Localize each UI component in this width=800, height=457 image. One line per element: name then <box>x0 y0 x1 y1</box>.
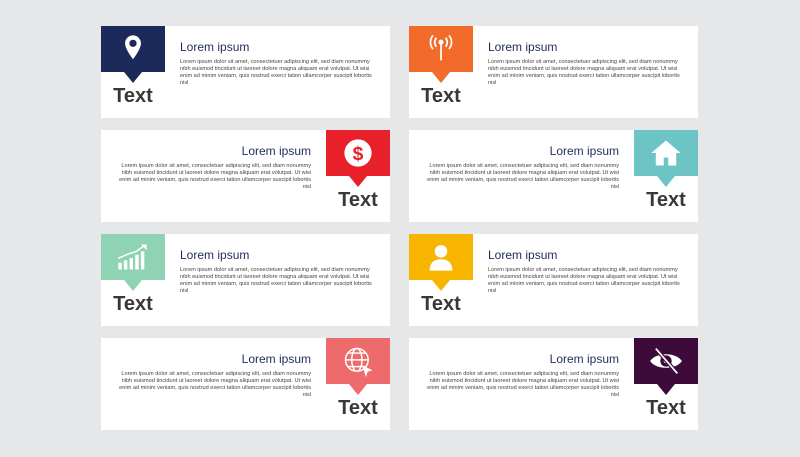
label text: Text <box>421 85 461 107</box>
label text: Text <box>113 85 153 107</box>
body text: Lorem ipsum dolor sit amet, consectetuer adipiscing elit, sed diam nonummy nibh euismod tincidunt ut laoreet dolore magna aliquam erat volutpat. Ut wisi enim ad minim veniam, quis nostrud exerci tation ullamcorper suscipit lobortis nisl <box>119 163 311 190</box>
card: chart <box>101 234 390 326</box>
label text: Text <box>421 293 461 315</box>
heading: Lorem ipsum <box>488 40 557 54</box>
heading: Lorem ipsum <box>180 40 249 54</box>
label text: Text <box>113 293 153 315</box>
label text: Text <box>338 397 378 419</box>
heading: Lorem ipsum <box>242 352 311 366</box>
heading: Lorem ipsum <box>488 248 557 262</box>
icon: antenna <box>409 26 473 72</box>
heading: Lorem ipsum <box>550 144 619 158</box>
body text: Lorem ipsum dolor sit amet, consectetuer adipiscing elit, sed diam nonummy nibh euismod tincidunt ut laoreet dolore magna aliquam erat volutpat. Ut wisi enim ad minim veniam, quis nostrud exerci tation ullamcorper suscipit lobortis nisl <box>488 59 680 86</box>
body text: Lorem ipsum dolor sit amet, consectetuer adipiscing elit, sed diam nonummy nibh euismod tincidunt ut laoreet dolore magna aliquam erat volutpat. Ut wisi enim ad minim veniam, quis nostrud exerci tation ullamcorper suscipit lobortis nisl <box>119 371 311 398</box>
label text: Text <box>338 189 378 211</box>
icon: eye slash <box>634 338 698 384</box>
card: hidden eye <box>409 338 698 430</box>
icon: dollar <box>326 130 390 176</box>
label text: Text <box>646 189 686 211</box>
card: user <box>409 234 698 326</box>
heading: Lorem ipsum <box>242 144 311 158</box>
heading: Lorem ipsum <box>550 352 619 366</box>
body text: Lorem ipsum dolor sit amet, consectetuer adipiscing elit, sed diam nonummy nibh euismod tincidunt ut laoreet dolore magna aliquam erat volutpat. Ut wisi enim ad minim veniam, quis nostrud exerci tation ullamcorper suscipit lobortis nisl <box>180 59 372 86</box>
body text: Lorem ipsum dolor sit amet, consectetuer adipiscing elit, sed diam nonummy nibh euismod tincidunt ut laoreet dolore magna aliquam erat volutpat. Ut wisi enim ad minim veniam, quis nostrud exerci tation ullamcorper suscipit lobortis nisl <box>427 371 619 398</box>
body text: Lorem ipsum dolor sit amet, consectetuer adipiscing elit, sed diam nonummy nibh euismod tincidunt ut laoreet dolore magna aliquam erat volutpat. Ut wisi enim ad minim veniam, quis nostrud exerci tation ullamcorper suscipit lobortis nisl <box>488 267 680 294</box>
card: signal <box>409 26 698 118</box>
icon: dollar: $ <box>353 144 364 165</box>
heading: Lorem ipsum <box>180 248 249 262</box>
card: globe <box>101 338 390 430</box>
body text: Lorem ipsum dolor sit amet, consectetuer adipiscing elit, sed diam nonummy nibh euismod tincidunt ut laoreet dolore magna aliquam erat volutpat. Ut wisi enim ad minim veniam, quis nostrud exerci tation ullamcorper suscipit lobortis nisl <box>427 163 619 190</box>
icon: house <box>634 130 698 176</box>
card: money <box>101 130 390 222</box>
icon: person <box>409 234 473 280</box>
icon: bar chart <box>101 234 165 280</box>
icon: globe <box>326 338 390 384</box>
icon: location pin <box>101 26 165 72</box>
card: home <box>409 130 698 222</box>
body text: Lorem ipsum dolor sit amet, consectetuer adipiscing elit, sed diam nonummy nibh euismod tincidunt ut laoreet dolore magna aliquam erat volutpat. Ut wisi enim ad minim veniam, quis nostrud exerci tation ullamcorper suscipit lobortis nisl <box>180 267 372 294</box>
card: location <box>101 26 390 118</box>
label text: Text <box>646 397 686 419</box>
